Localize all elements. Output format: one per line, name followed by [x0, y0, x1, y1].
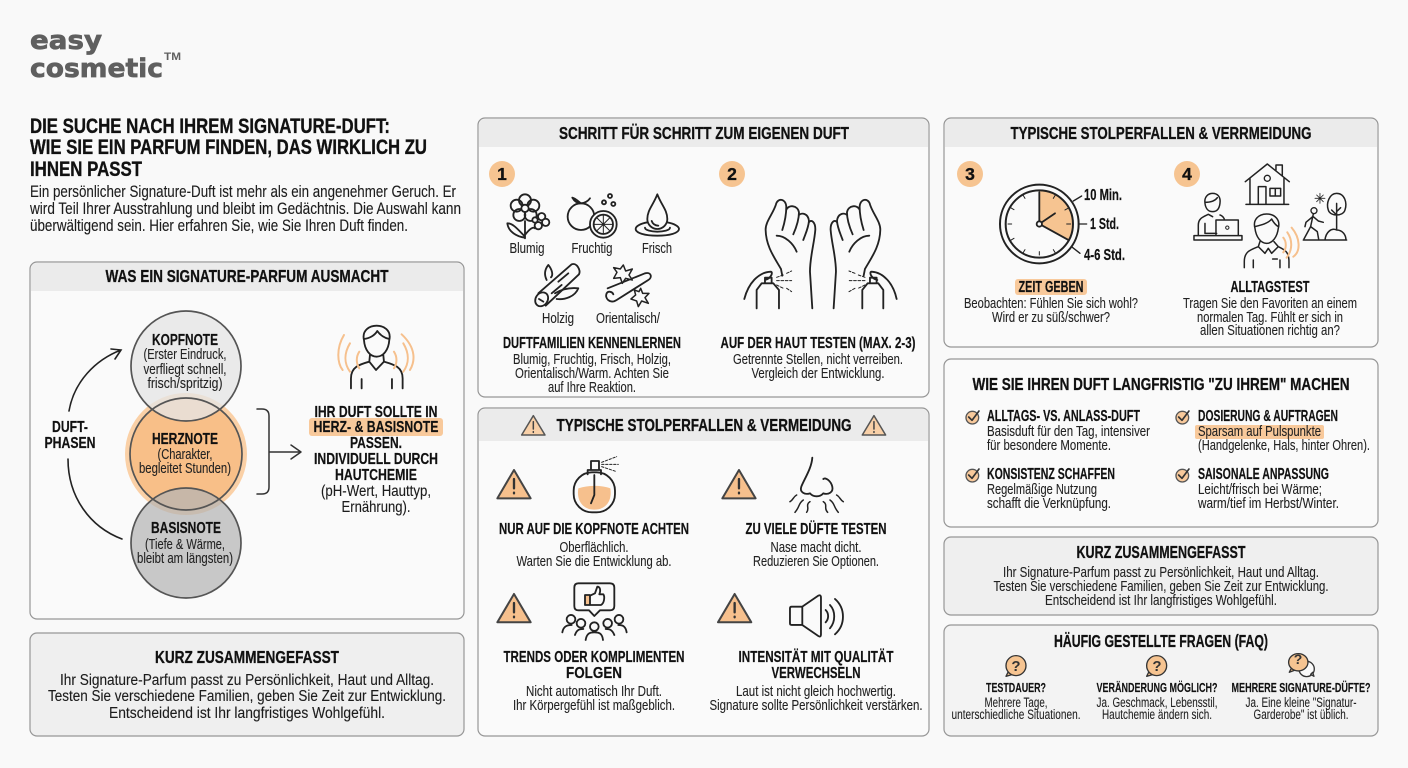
text block: intensität: Laut ist nicht gleich hochwertig.	[736, 684, 896, 700]
text block: zeit geben: Wird er zu süß/schwer?	[992, 310, 1110, 326]
tip: dosierung	[1195, 408, 1370, 454]
logo	[30, 26, 181, 84]
faq: testdauer: Mehrere Tage,	[984, 695, 1048, 710]
venn diagram: duftphasen: (Erster Eindruck,	[144, 347, 226, 363]
bracket arrow	[257, 409, 301, 494]
venn diagram: duftphasen: KOPFNOTE	[152, 332, 218, 349]
heading with warning icons: TYPISCHE STOLPERFALLEN & VERMEIDUNG	[556, 415, 852, 435]
icon: speaker	[790, 595, 843, 637]
intro text: wird Teil Ihrer Ausstrahlung und bleibt im Gedächtnis. Die Auswahl kann	[29, 200, 461, 218]
icon: question bubbles: ?	[1294, 651, 1302, 667]
step badge 1: 1	[497, 164, 507, 184]
venn diagram: duftphasen: bleibt am längsten)	[137, 551, 233, 567]
key message: HAUTCHEMIE	[335, 467, 417, 484]
text block: step 2	[720, 335, 916, 382]
key message: INDIVIDUELL DURCH	[314, 451, 438, 468]
text block: zu viele düfte: Nase macht dicht.	[770, 540, 862, 556]
text block: trends: Ihr Körpergefühl ist maßgeblich.	[513, 698, 675, 714]
title: DIE SUCHE NACH IHREM SIGNATURE-DUFT:	[30, 115, 390, 138]
family labels: Blumig	[510, 241, 544, 257]
key message: PASSEN.	[350, 435, 402, 452]
text block: step 2: Getrennte Stellen, nicht verreiben.	[733, 352, 903, 368]
panel: langfristig	[944, 359, 1378, 527]
key message: HERZ- & BASISNOTE	[314, 419, 438, 436]
faq: testdauer: unterschiedliche Situationen.	[952, 707, 1080, 722]
faq: veränderung: Ja. Geschmack, Lebensstil,	[1096, 695, 1218, 710]
icon: everyday situations	[1194, 164, 1347, 268]
tip: alltags- vs. anlass-duft: ALLTAGS- VS. ANLASS-DUFT	[987, 408, 1140, 425]
text block: step 1: DUFTFAMILIEN KENNENLERNEN	[503, 335, 681, 352]
text block: kopfnote: NUR AUF DIE KOPFNOTE ACHTEN	[499, 521, 689, 538]
text block: intensität: VERWECHSELN	[772, 665, 860, 682]
cycle label and arrows: PHASEN	[44, 435, 96, 452]
text block: zu viele düfte: ZU VIELE DÜFTE TESTEN	[746, 521, 886, 538]
text block: alltagstest	[1183, 279, 1357, 339]
venn diagram: duftphasen: verfliegt schnell,	[144, 362, 226, 378]
text block: kopfnote: Warten Sie die Entwicklung ab.	[516, 554, 672, 570]
text block: step 2: AUF DER HAUT TESTEN (MAX. 2-3)	[720, 335, 916, 352]
family labels	[510, 241, 672, 327]
icon: person with scent waves	[338, 326, 414, 388]
text block: intensität	[710, 649, 922, 714]
faq: mehrere düfte: Ja. Eine kleine "Signatur-	[1246, 695, 1356, 710]
faq: veränderung: Hautchemie ändern sich.	[1102, 707, 1212, 722]
text block: zeit geben: Beobachten: Fühlen Sie sich wohl?	[964, 296, 1138, 312]
text block: intensität: INTENSITÄT MIT QUALITÄT	[738, 649, 894, 666]
panel: kurz zusammengefasst right	[944, 537, 1378, 615]
key message: Ernährung).	[342, 499, 410, 516]
tip: saisonale anpassung: Leicht/frisch bei Wärme;	[1198, 482, 1322, 498]
text block: zeit geben: ZEIT GEBEN	[1018, 279, 1084, 296]
panel: was ein signature-parfum ausmacht	[30, 262, 464, 619]
text block: zeit geben	[964, 279, 1138, 326]
icon: question bubbles: ?	[1152, 658, 1162, 675]
icon: nose	[790, 458, 843, 512]
venn diagram: duftphasen	[125, 311, 247, 598]
icon: citrus	[568, 194, 617, 238]
text block: alltagstest: Tragen Sie den Favoriten an einem	[1183, 296, 1357, 312]
logo: cosmetic	[30, 54, 163, 84]
text block: alltagstest: allen Situationen richtig an?	[1200, 323, 1340, 339]
key message	[309, 404, 443, 516]
warning icons	[497, 470, 756, 622]
icon: water drop	[636, 194, 679, 236]
intro text	[29, 183, 461, 235]
tip: alltags- vs. anlass-duft	[987, 408, 1150, 454]
heading: HÄUFIG GESTELLTE FRAGEN (FAQ)	[1054, 631, 1268, 651]
step badge 2	[719, 161, 745, 187]
faq: veränderung: VERÄNDERUNG MÖGLICH?	[1096, 680, 1218, 695]
panel: schritt für schritt	[478, 118, 929, 397]
cycle label and arrows: DUFT-	[52, 419, 88, 436]
faq: testdauer	[952, 680, 1080, 722]
intro text: überwältigend sein. Hier erfahren Sie, wie Sie Ihren Duft finden.	[30, 217, 408, 235]
tip: konsistenz: schafft die Verknüpfung.	[987, 496, 1111, 512]
heading: WAS EIN SIGNATURE-PARFUM AUSMACHT	[106, 266, 389, 286]
venn diagram: duftphasen: HERZNOTE	[152, 431, 218, 448]
family labels: Frisch	[642, 241, 672, 257]
icon: thumbs up crowd	[562, 583, 627, 640]
panel: typische stolperfallen	[478, 408, 929, 736]
text block: zu viele düfte: Reduzieren Sie Optionen.	[753, 554, 879, 570]
tip: saisonale anpassung: SAISONALE ANPASSUNG	[1198, 466, 1329, 483]
heading: SCHRITT FÜR SCHRITT ZUM EIGENEN DUFT	[559, 123, 849, 143]
icon: clock with time labels: 10 Min.	[1084, 187, 1122, 204]
text block: trends	[504, 649, 684, 714]
text block: step 1	[503, 335, 681, 396]
panel: kurz zusammengefasst right: KURZ ZUSAMMENGEFASST	[1076, 542, 1246, 562]
icon: perfume bottle	[574, 457, 618, 512]
tip: konsistenz: Regelmäßige Nutzung	[987, 482, 1097, 498]
tip: konsistenz: KONSISTENZ SCHAFFEN	[987, 466, 1115, 483]
check icons	[966, 411, 1189, 482]
icon: question bubbles	[1006, 651, 1314, 677]
faq: veränderung	[1096, 680, 1218, 722]
text block: step 1: auf Ihre Reaktion.	[548, 380, 636, 396]
heading: TYPISCHE STOLPERFALLEN & VERRMEIDUNG	[1010, 123, 1312, 143]
tip: saisonale anpassung: warm/tief im Herbst/Winter.	[1197, 496, 1339, 512]
panel: kurz zusammengefasst left: KURZ ZUSAMMENGEFASST	[155, 647, 339, 667]
venn diagram: duftphasen: frisch/spritzig)	[148, 376, 222, 392]
family labels: Orientalisch/	[596, 311, 661, 327]
text block: alltagstest: normalen Tag. Fühlt er sich in	[1197, 310, 1343, 326]
venn diagram: duftphasen: begleitet Stunden)	[139, 461, 231, 477]
faq: testdauer: TESTDAUER?	[986, 680, 1046, 695]
text block: kopfnote	[499, 521, 689, 570]
panel: faq	[944, 625, 1378, 736]
icon: flower	[507, 194, 549, 238]
text block: step 1: Orientalisch/Warm. Achten Sie	[515, 366, 669, 382]
faq: mehrere düfte	[1232, 680, 1371, 722]
title: IHNEN PASST	[30, 158, 142, 181]
icon: clock with time labels: 1 Std.	[1090, 216, 1119, 233]
text block: alltagstest: ALLTAGSTEST	[1230, 279, 1310, 296]
cycle label and arrows	[44, 349, 122, 539]
icon: wrists with perfume spray	[744, 200, 897, 308]
step badge 2: 2	[727, 164, 737, 184]
tip: dosierung: DOSIERUNG & AUFTRAGEN	[1198, 408, 1338, 425]
icon: cinnamon and star anise	[606, 265, 651, 307]
tip: konsistenz	[987, 466, 1115, 512]
venn diagram: duftphasen: (Tiefe & Wärme,	[145, 537, 225, 553]
panel: kurz zusammengefasst left: Entscheidend ist Ihr langfristiges Wohlgefühl.	[109, 705, 385, 722]
text block: trends: TRENDS ODER KOMPLIMENTEN	[504, 649, 684, 666]
icon: clock with time labels	[1000, 185, 1125, 264]
text block: kopfnote: Oberflächlich.	[560, 540, 628, 556]
key message: (pH-Wert, Hauttyp,	[321, 483, 431, 500]
tip: dosierung: Sparsam auf Pulspunkte	[1198, 424, 1321, 440]
text block: zu viele düfte	[746, 521, 886, 570]
title	[30, 115, 427, 181]
step badge 1	[489, 161, 515, 187]
text block: step 2: Vergleich der Entwicklung.	[752, 366, 884, 382]
logo: easy	[30, 26, 102, 56]
intro text: Ein persönlicher Signature-Duft ist mehr als ein angenehmer Geruch. Er	[30, 183, 456, 201]
key message: IHR DUFT SOLLTE IN	[314, 404, 438, 421]
icon: question bubbles: ?	[1011, 658, 1021, 675]
faq: mehrere düfte: Garderobe" ist üblich.	[1254, 707, 1348, 722]
panel: kurz zusammengefasst left	[30, 633, 464, 736]
step badge 4: 4	[1182, 164, 1192, 184]
panel: steps 3 and 4	[944, 118, 1378, 347]
panel: kurz zusammengefasst left: Testen Sie verschiedene Familien, geben Sie Zeit zur Entwicklung.	[48, 688, 446, 705]
tip: alltags- vs. anlass-duft: für besondere Momente.	[987, 438, 1111, 454]
venn diagram: duftphasen: (Charakter,	[158, 447, 212, 463]
logo: TM	[164, 51, 181, 63]
step badge 4	[1174, 161, 1200, 187]
title: WIE SIE EIN PARFUM FINDEN, DAS WIRKLICH ZU	[30, 136, 427, 159]
panel: kurz zusammengefasst right: Ihr Signature-Parfum passt zu Persönlichkeit, Haut und Alltag.	[1003, 565, 1319, 581]
icon: wood log	[533, 264, 579, 309]
family labels: Holzig	[542, 311, 574, 327]
icon: clock with time labels: 4-6 Std.	[1084, 247, 1125, 264]
panel: kurz zusammengefasst left: Ihr Signature-Parfum passt zu Persönlichkeit, Haut und Alltag.	[60, 672, 434, 689]
tip: alltags- vs. anlass-duft: Basisduft für den Tag, intensiver	[987, 424, 1150, 440]
text block: step 1: Blumig, Fruchtig, Frisch, Holzig,	[513, 352, 671, 368]
step badge 3	[957, 161, 983, 187]
tip: saisonale anpassung	[1197, 466, 1339, 512]
family labels: Fruchtig	[572, 241, 612, 257]
panel: kurz zusammengefasst right: Entscheidend ist Ihr langfristiges Wohlgefühl.	[1045, 593, 1277, 609]
step badge 3: 3	[965, 164, 975, 184]
text block: intensität: Signature sollte Persönlichkeit verstärken.	[710, 698, 922, 714]
text block: trends: Nicht automatisch Ihr Duft.	[526, 684, 662, 700]
text block: trends: FOLGEN	[566, 665, 622, 682]
venn diagram: duftphasen: BASISNOTE	[151, 520, 221, 537]
